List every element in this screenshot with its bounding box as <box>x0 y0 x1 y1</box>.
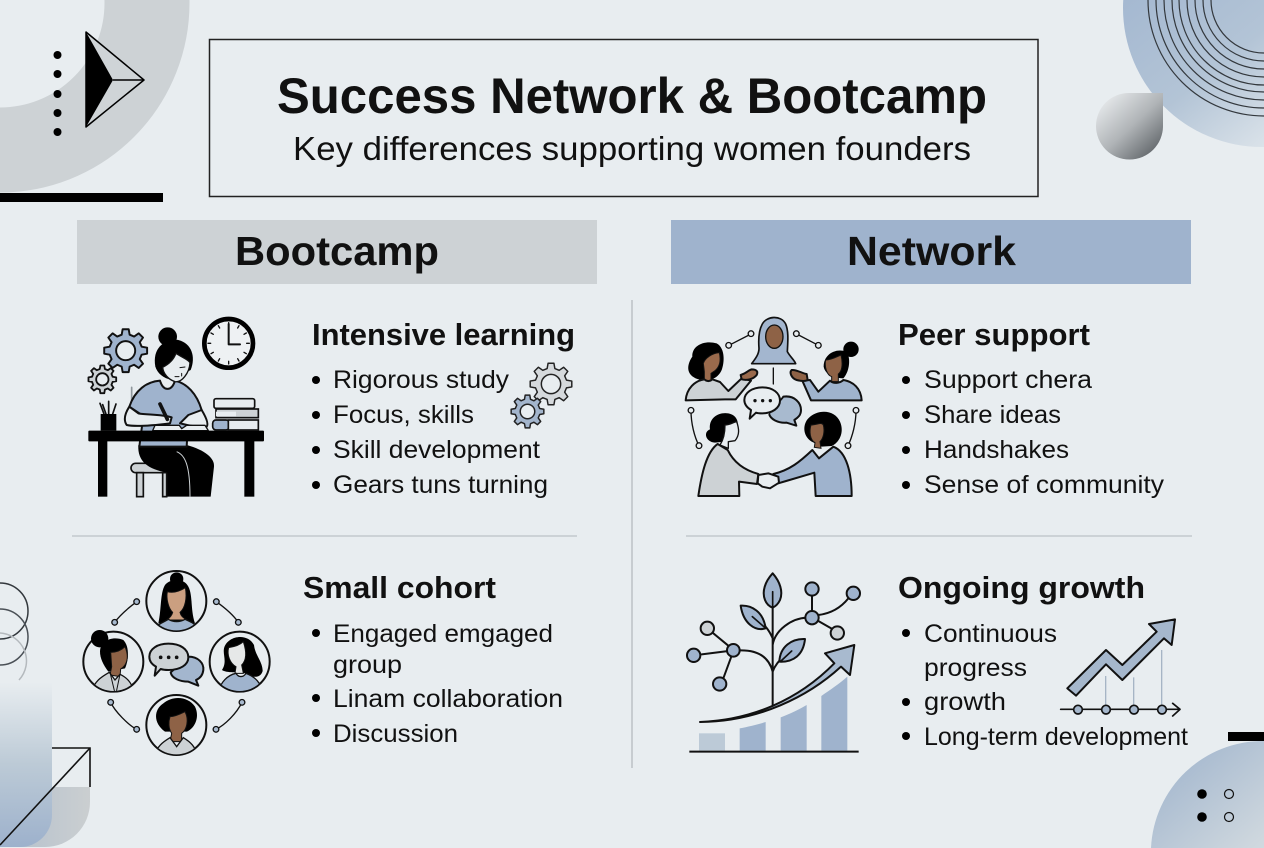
speech bubbles <box>149 644 203 686</box>
desk <box>88 431 264 497</box>
text block: Ongoing growth: Long-term development <box>924 723 1188 751</box>
text block: Ongoing growth: Continuous <box>924 620 1057 648</box>
trousers <box>138 445 214 497</box>
text block: Peer support: Support chera <box>924 366 1092 394</box>
person: woman shaking hands, right <box>773 412 852 496</box>
person: woman left, curly hair <box>686 342 757 400</box>
title box <box>210 40 1038 196</box>
text block: Intensive learning: Rigorous study <box>333 366 510 394</box>
person: woman shaking hands, left <box>698 413 758 496</box>
text block: Peer support: Sense of community <box>924 471 1165 499</box>
text block: Intensive learning: Intensive learning <box>312 317 575 352</box>
speech bubbles <box>744 387 801 426</box>
text block: Small cohort: group <box>333 651 402 679</box>
person: woman in hijab <box>752 317 796 364</box>
text block: Peer support: Peer support <box>898 317 1090 352</box>
chair <box>131 387 167 497</box>
column header: Bootcamp: Bootcamp <box>235 228 439 274</box>
text block: Small cohort: Engaged emgaged <box>333 620 553 648</box>
icon: stack of books <box>213 399 258 430</box>
text block: Ongoing growth: Ongoing growth <box>898 570 1145 605</box>
person: woman right, hair bun <box>791 342 862 400</box>
text block: Intensive learning: Skill development <box>333 436 540 464</box>
bar chart <box>689 677 859 752</box>
connector lines <box>688 331 859 448</box>
text block: Small cohort <box>303 570 563 748</box>
illustration: peer support group and handshake <box>686 317 862 496</box>
icon: pencil cup <box>100 401 116 431</box>
portrait: right woman with long hair <box>210 632 270 693</box>
decoration: bottom-left shapes <box>0 583 90 847</box>
plant stem and branches <box>702 592 848 705</box>
text block: Peer support <box>898 317 1165 499</box>
column header: Bootcamp <box>77 220 597 284</box>
icon: handshake <box>758 473 779 488</box>
decoration: bottom-right circle and dots <box>1151 732 1264 848</box>
portrait: left woman with bun <box>83 630 143 693</box>
illustration: small cohort circle of women <box>83 571 270 757</box>
text block: Small cohort: Discussion <box>333 720 458 748</box>
plant leaves <box>741 573 805 662</box>
connector lines <box>108 599 245 732</box>
bun and hair <box>155 327 193 382</box>
icon: pair of gears beside list <box>511 363 572 428</box>
text block: Ongoing growth: growth <box>924 688 1006 716</box>
text block: Small cohort: Small cohort <box>303 570 496 605</box>
text block: Intensive learning: Gears tuns turning <box>333 471 548 499</box>
open book <box>153 425 208 431</box>
text block: Intensive learning: Focus, skills <box>333 401 474 429</box>
network nodes <box>687 582 860 691</box>
illustration: woman studying at desk <box>88 319 264 497</box>
portrait: bottom woman with afro <box>146 695 206 757</box>
text block: Peer support: Share ideas <box>924 401 1061 429</box>
growth arrow <box>700 645 854 722</box>
text block: Small cohort: Linam collaboration <box>333 685 563 713</box>
title: Success Network & Bootcamp <box>277 68 987 124</box>
text block: Peer support: Handshakes <box>924 436 1069 464</box>
icon: large gear <box>104 329 147 372</box>
text block: Ongoing growth: progress <box>924 654 1027 682</box>
portrait: top woman <box>146 571 206 633</box>
shirt <box>129 381 202 447</box>
decoration: top-left ring and arrow <box>0 0 163 202</box>
subtitle: Key differences supporting women founders <box>293 130 971 167</box>
text block: Intensive learning <box>312 317 575 499</box>
decoration: top-right circle with concentric arcs <box>1096 0 1264 160</box>
column header: Network <box>671 220 1191 284</box>
icon: small gear <box>88 365 116 393</box>
icon: clock <box>204 319 253 368</box>
illustration: growth plant, bars and arrow <box>687 573 860 752</box>
text block: Ongoing growth <box>898 570 1188 751</box>
icon: small rising arrow chart with timeline <box>1061 619 1180 716</box>
arms <box>125 407 172 426</box>
column header: Network: Network <box>847 228 1016 274</box>
